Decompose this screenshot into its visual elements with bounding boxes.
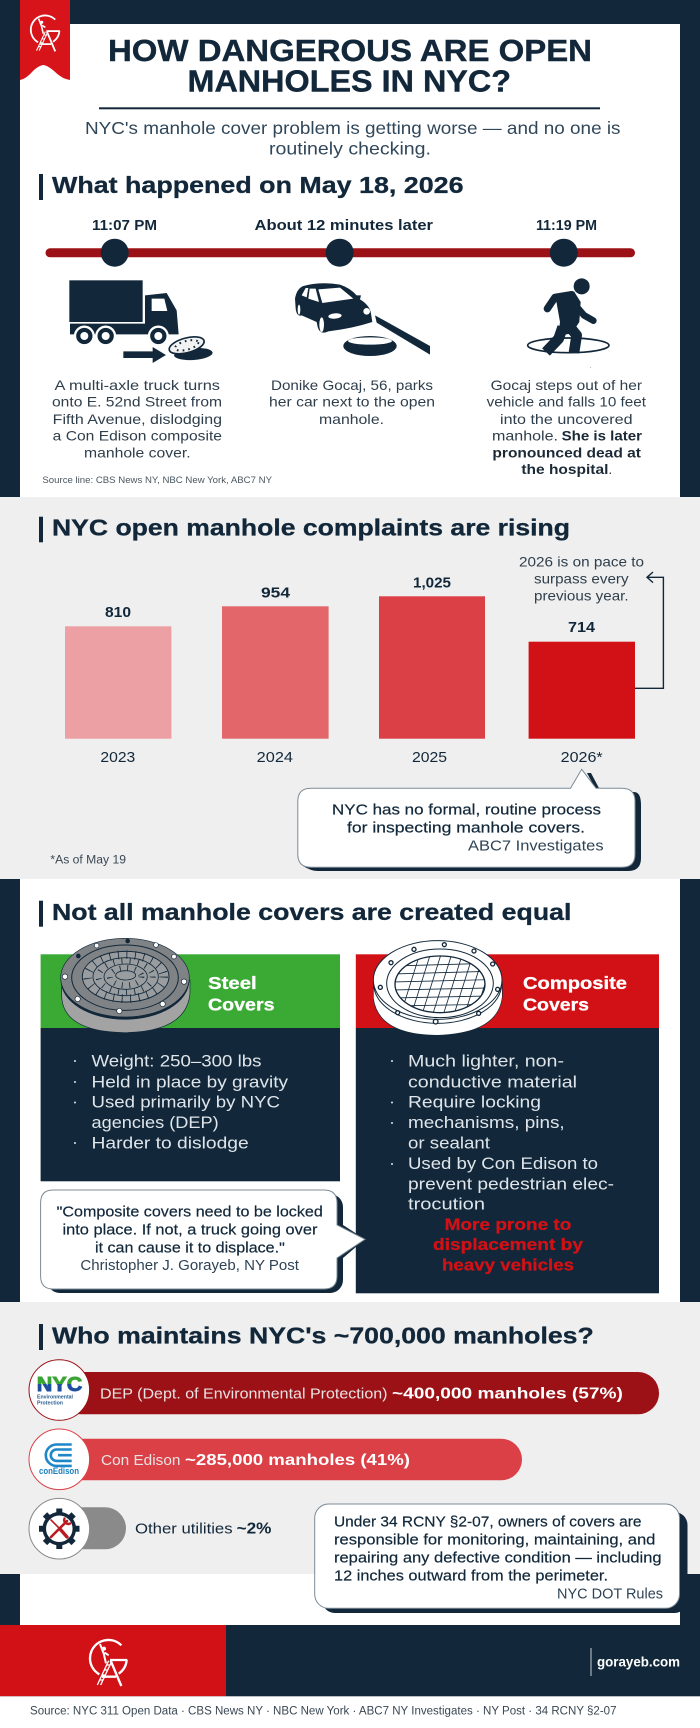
heading: covers: Not all manhole covers are created equal <box>52 899 571 925</box>
icon: composite cover <box>373 941 502 1035</box>
title: MANHOLES IN NYC? <box>188 65 511 99</box>
callout: no routine process: ABC7 Investigates <box>468 838 604 854</box>
ribbon with logo <box>20 0 70 80</box>
steel list: Weight: 250–300 lbs <box>92 1053 262 1071</box>
panel: steel covers <box>41 938 340 1181</box>
callout: Gorayeb quote: "Composite covers need to be locked <box>57 1204 323 1220</box>
icon: steel cover <box>61 938 190 1033</box>
callout: NYC DOT rules: NYC DOT Rules <box>557 1586 663 1602</box>
step 1 text: Fifth Avenue, dislodging <box>53 411 222 427</box>
callout: NYC DOT rules: responsible for monitoring, maintaining, and <box>334 1533 655 1549</box>
composite list: mechanisms, pins, <box>408 1114 565 1132</box>
step 1 text: manhole cover. <box>84 444 191 460</box>
composite list <box>391 1053 614 1214</box>
step 1 text: onto E. 52nd Street from <box>52 394 222 410</box>
title <box>108 34 592 99</box>
bar chart: 954 <box>261 585 291 602</box>
steel list <box>74 1053 289 1153</box>
step 3 text: pronounced dead at <box>492 444 641 460</box>
composite list: Used by Con Edison to <box>408 1155 598 1173</box>
arrow: to note <box>635 572 663 688</box>
composite warning: displacement by <box>433 1235 584 1254</box>
step 2 text: manhole. <box>319 411 384 427</box>
panel: composite covers: Composite <box>523 973 627 993</box>
bar: DEP <box>29 1360 659 1420</box>
composite warning <box>433 1215 584 1275</box>
bar: DEP: DEP (Dept. of Environmental Protection) <box>100 1387 388 1403</box>
callout: Gorayeb quote: it can cause it to displace." <box>95 1240 285 1256</box>
steel list: Used primarily by NYC <box>92 1094 280 1112</box>
step 3 text: vehicle and falls 10 feet <box>487 394 646 410</box>
footer logo <box>90 1640 127 1686</box>
step 2 text: her car next to the open <box>269 394 435 410</box>
panel: steel covers: Steel <box>208 973 257 993</box>
callout: Gorayeb quote <box>41 1190 365 1293</box>
source footer: Source: NYC 311 Open Data · CBS News NY · NBC New York · ABC7 NY Investigates · NY Post · 34 RCNY §2-07 <box>30 1705 616 1717</box>
icon: person falling into manhole <box>528 278 609 368</box>
icon: NYC DEP logo: Environmental <box>37 1394 74 1400</box>
step 1 text <box>52 377 222 460</box>
bar chart: 1,025 <box>413 575 451 592</box>
composite list: Require locking <box>408 1094 541 1112</box>
bar: Con Edison: Con Edison <box>101 1453 180 1469</box>
step 1 text: A multi-axle truck turns <box>54 377 220 393</box>
heading: who maintains: Who maintains NYC's ~700,000 manholes? <box>52 1322 594 1348</box>
footer band: gorayeb.com <box>597 1654 680 1670</box>
panel: composite covers <box>356 941 659 1293</box>
icon: NYC DEP logo <box>29 1360 90 1420</box>
callout: no routine process: for inspecting manhole covers. <box>347 820 585 836</box>
bar chart: 2026* <box>561 750 603 766</box>
composite list: trocution <box>408 1196 485 1214</box>
step 3 text: into the uncovered <box>500 411 633 427</box>
step 3 text: manhole. <box>492 428 558 444</box>
note: on pace: previous year. <box>534 587 629 603</box>
icon: Con Edison logo <box>29 1429 90 1490</box>
note: on pace: surpass every <box>534 571 629 587</box>
callout: no routine process <box>298 769 641 871</box>
composite list: prevent pedestrian elec- <box>408 1176 614 1194</box>
callout: Gorayeb quote: into place. If not, a truck going over <box>62 1222 318 1238</box>
icon: NYC DEP logo: NYC <box>37 1374 82 1396</box>
step 3 text <box>487 377 646 477</box>
subtitle: NYC's manhole cover problem is getting worse — and no one is <box>85 118 621 138</box>
bar chart: 714 <box>568 619 596 636</box>
icon: truck dislodging cover <box>69 280 213 363</box>
footer band <box>0 1625 700 1696</box>
step 3 text: . <box>608 461 612 477</box>
bar: other utilities <box>29 1498 271 1559</box>
bar: Con Edison <box>29 1429 522 1490</box>
step 3 text: the hospital <box>521 461 608 477</box>
timeline: 11:19 PM <box>536 217 597 234</box>
bar: other utilities: Other utilities <box>135 1522 233 1538</box>
composite list: Much lighter, non- <box>408 1053 564 1071</box>
callout: no routine process: NYC has no formal, routine process <box>332 802 601 818</box>
bar: DEP: ~400,000 manholes (57%) <box>392 1386 623 1403</box>
callout: NYC DOT rules: 12 inches outward from the perimeter. <box>334 1569 608 1585</box>
subtitle <box>85 118 621 158</box>
source footer <box>0 1696 700 1728</box>
footnote: *As of May 19 <box>50 854 126 866</box>
timeline <box>46 217 635 267</box>
note: on pace: 2026 is on pace to <box>519 554 644 570</box>
icon: car next to open manhole <box>295 283 430 356</box>
panel: steel covers: Covers <box>208 995 275 1015</box>
timeline: 11:07 PM <box>92 217 157 234</box>
step 2 text: Donike Gocaj, 56, parks <box>271 377 433 393</box>
bar chart: 2024 <box>257 750 293 766</box>
subtitle: routinely checking. <box>269 138 431 158</box>
panel: composite covers: Covers <box>523 995 589 1015</box>
note: on pace <box>519 554 644 603</box>
bar chart <box>65 575 635 766</box>
callout: Gorayeb quote: Christopher J. Gorayeb, NY Post <box>80 1258 299 1274</box>
icon: Con Edison logo: conEdison <box>39 1466 79 1477</box>
callout: NYC DOT rules <box>315 1504 688 1613</box>
bar: other utilities: ~2% <box>237 1521 271 1538</box>
icon: gear and tools <box>29 1498 90 1559</box>
title: HOW DANGEROUS ARE OPEN <box>108 34 592 68</box>
composite warning: More prone to <box>445 1215 571 1234</box>
heading: complaints: NYC open manhole complaints are rising <box>52 515 570 541</box>
callout: NYC DOT rules: Under 34 RCNY §2-07, owners of covers are <box>334 1515 642 1531</box>
steel list: agencies (DEP) <box>92 1114 219 1132</box>
composite list: conductive material <box>408 1073 577 1091</box>
bar chart: 2025 <box>412 750 447 766</box>
source line: Source line: CBS News NY, NBC New York, ABC7 NY <box>42 475 273 486</box>
heading: what happened: What happened on May 18, 2026 <box>52 172 464 198</box>
step 1 text: a Con Edison composite <box>53 428 222 444</box>
bar chart: 810 <box>105 604 131 621</box>
timeline: About 12 minutes later <box>254 217 433 234</box>
bar chart: 2023 <box>100 750 135 766</box>
step 3 text: Gocaj steps out of her <box>491 377 642 393</box>
icon: NYC DEP logo: Protection <box>37 1400 63 1406</box>
step 2 text <box>269 377 435 427</box>
composite warning: heavy vehicles <box>442 1256 574 1275</box>
step 3 text: She is later <box>562 428 643 444</box>
composite list: or sealant <box>408 1135 490 1153</box>
steel list: Held in place by gravity <box>92 1073 289 1091</box>
steel list: Harder to dislodge <box>92 1135 249 1153</box>
bar: Con Edison: ~285,000 manholes (41%) <box>185 1452 410 1469</box>
callout: NYC DOT rules: repairing any defective condition — including <box>334 1551 662 1567</box>
